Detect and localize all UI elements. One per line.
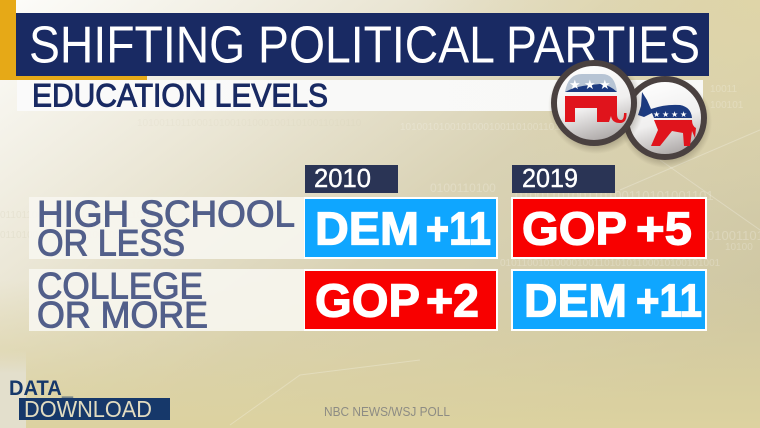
background: 10011: [710, 84, 738, 95]
result: high school 2019: [511, 197, 707, 259]
title: SHIFTING POLITICAL PARTIES: [29, 16, 700, 74]
elephant badge: ★: [584, 77, 596, 92]
subtitle strip: [17, 78, 703, 114]
background: 0100110100: [430, 181, 496, 195]
data download logo: DOWNLOAD: [24, 396, 152, 422]
elephant badge: [548, 58, 644, 154]
background: 10100101001010001001101001101: [400, 122, 560, 133]
row label: college or more: OR MORE: [37, 294, 208, 336]
data download logo: DATA_: [9, 377, 73, 400]
background: 0100110100110100110101001101: [515, 188, 714, 203]
result: college 2019: +11: [636, 274, 702, 326]
donkey badge: ★: [662, 110, 669, 119]
year label: 2010: [305, 163, 398, 193]
row label: high school or less: OR LESS: [37, 222, 185, 264]
subtitle: EDUCATION LEVELS: [32, 78, 328, 114]
gold accent: [0, 0, 147, 80]
row label: college or more: COLLEGE: [37, 266, 203, 306]
elephant badge: ★: [599, 77, 611, 92]
result: high school 2019: +5: [636, 202, 692, 254]
year label: 2010: 2010: [314, 163, 371, 193]
donkey badge: [620, 76, 712, 168]
result: high school 2010: [304, 197, 498, 259]
result: college 2019: DEM: [524, 274, 627, 326]
result: high school 2010: DEM: [315, 202, 419, 254]
row label: high school or less: HIGH SCHOOL: [37, 194, 295, 234]
title bar: [16, 13, 709, 76]
background: 01101100010100101000100110: [0, 210, 143, 221]
background: 01101001101100101001010: [0, 230, 126, 241]
result: high school 2010: +11: [426, 202, 491, 254]
background: 10100: [725, 242, 753, 253]
row label: high school or less: [29, 194, 305, 264]
result: college 2010: GOP: [315, 274, 420, 326]
result: college 2010: [304, 269, 498, 331]
year label: 2019: [512, 163, 615, 193]
source: NBC NEWS/WSJ POLL: [324, 404, 450, 419]
background: 10100110110001010010100010011010011010110: [137, 118, 362, 129]
donkey badge: ★: [653, 110, 660, 119]
row label: college or more: [29, 266, 305, 336]
background: 0101100101000010011010101100010100101001: [500, 258, 721, 269]
elephant badge: ★: [569, 77, 581, 92]
data download logo: [9, 377, 170, 422]
donkey badge: ★: [671, 110, 678, 119]
result: high school 2019: GOP: [522, 202, 627, 254]
donkey badge: ★: [680, 110, 687, 119]
background: 100101: [710, 100, 744, 111]
result: college 2019: [511, 269, 707, 331]
year label: 2019: 2019: [522, 163, 578, 193]
result: college 2010: +2: [426, 274, 479, 326]
